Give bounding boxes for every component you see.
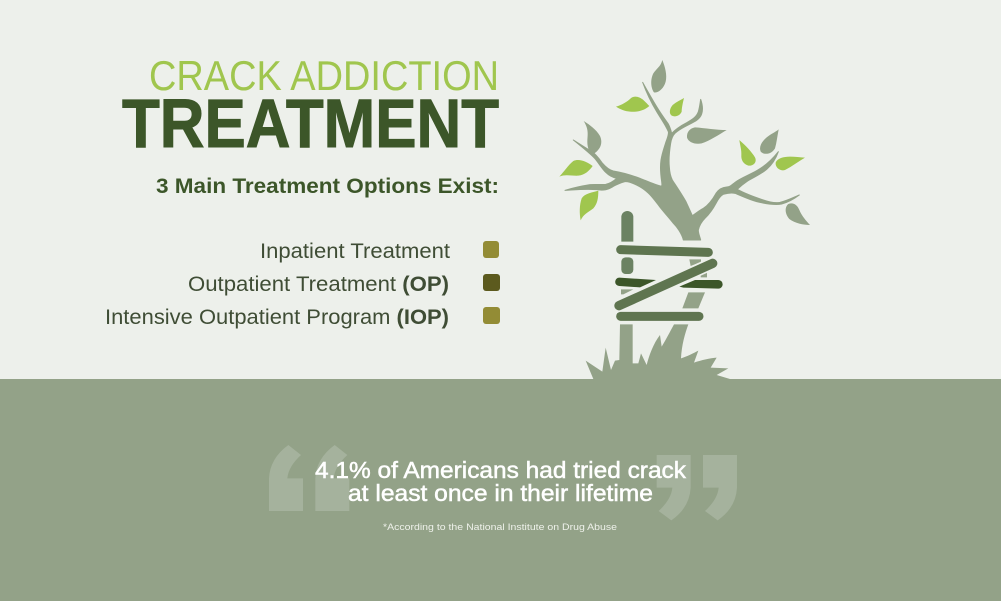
option: intensive outpatient: Intensive Outpatient Program (IOP) bbox=[105, 306, 449, 329]
leaf bbox=[670, 98, 684, 116]
treatment options list bbox=[105, 240, 500, 329]
option: outpatient: Outpatient Treatment (OP) bbox=[188, 273, 449, 296]
leaf bbox=[776, 157, 805, 170]
leaf bbox=[584, 121, 601, 154]
bandage bottom bbox=[621, 303, 699, 330]
leaf bbox=[739, 140, 756, 166]
source footnote: *According to the National Institute on Drug Abuse bbox=[383, 522, 617, 533]
quote text: 4.1% of Americans had tried crack bbox=[315, 457, 687, 483]
leaf bbox=[559, 160, 593, 177]
grass and trunk base bbox=[570, 324, 750, 382]
quote text bbox=[315, 457, 687, 506]
bandage top bbox=[621, 250, 708, 252]
wooden post top bbox=[621, 211, 633, 242]
quote marks bbox=[269, 445, 737, 520]
leaf bbox=[580, 191, 598, 220]
leaf bbox=[760, 129, 779, 154]
closing quote bbox=[657, 455, 737, 520]
leaf bbox=[687, 127, 727, 144]
illustration: tree bbox=[559, 60, 810, 382]
leaf bbox=[651, 60, 666, 92]
bandage diagonal bbox=[619, 263, 713, 306]
tree trunk and branches bbox=[559, 60, 810, 240]
title line: crack addiction: CRACK ADDICTION bbox=[149, 52, 499, 99]
title line: treatment: TREATMENT bbox=[122, 85, 499, 162]
wooden post middle bbox=[621, 257, 633, 274]
ground panel bbox=[0, 379, 1001, 601]
quote text: at least once in their lifetime bbox=[348, 480, 653, 506]
trunk fragments bbox=[621, 259, 707, 308]
option: inpatient: Inpatient Treatment bbox=[260, 240, 450, 263]
subtitle: 3 Main Treatment Options Exist: bbox=[156, 175, 499, 198]
bandage dark left bbox=[615, 278, 656, 287]
trunk base, grass and bandages bbox=[570, 211, 750, 382]
opening quote bbox=[269, 445, 349, 511]
title bbox=[122, 52, 499, 162]
leaf bbox=[786, 203, 810, 225]
leaf bbox=[616, 97, 649, 112]
bandage dark right bbox=[679, 280, 723, 289]
